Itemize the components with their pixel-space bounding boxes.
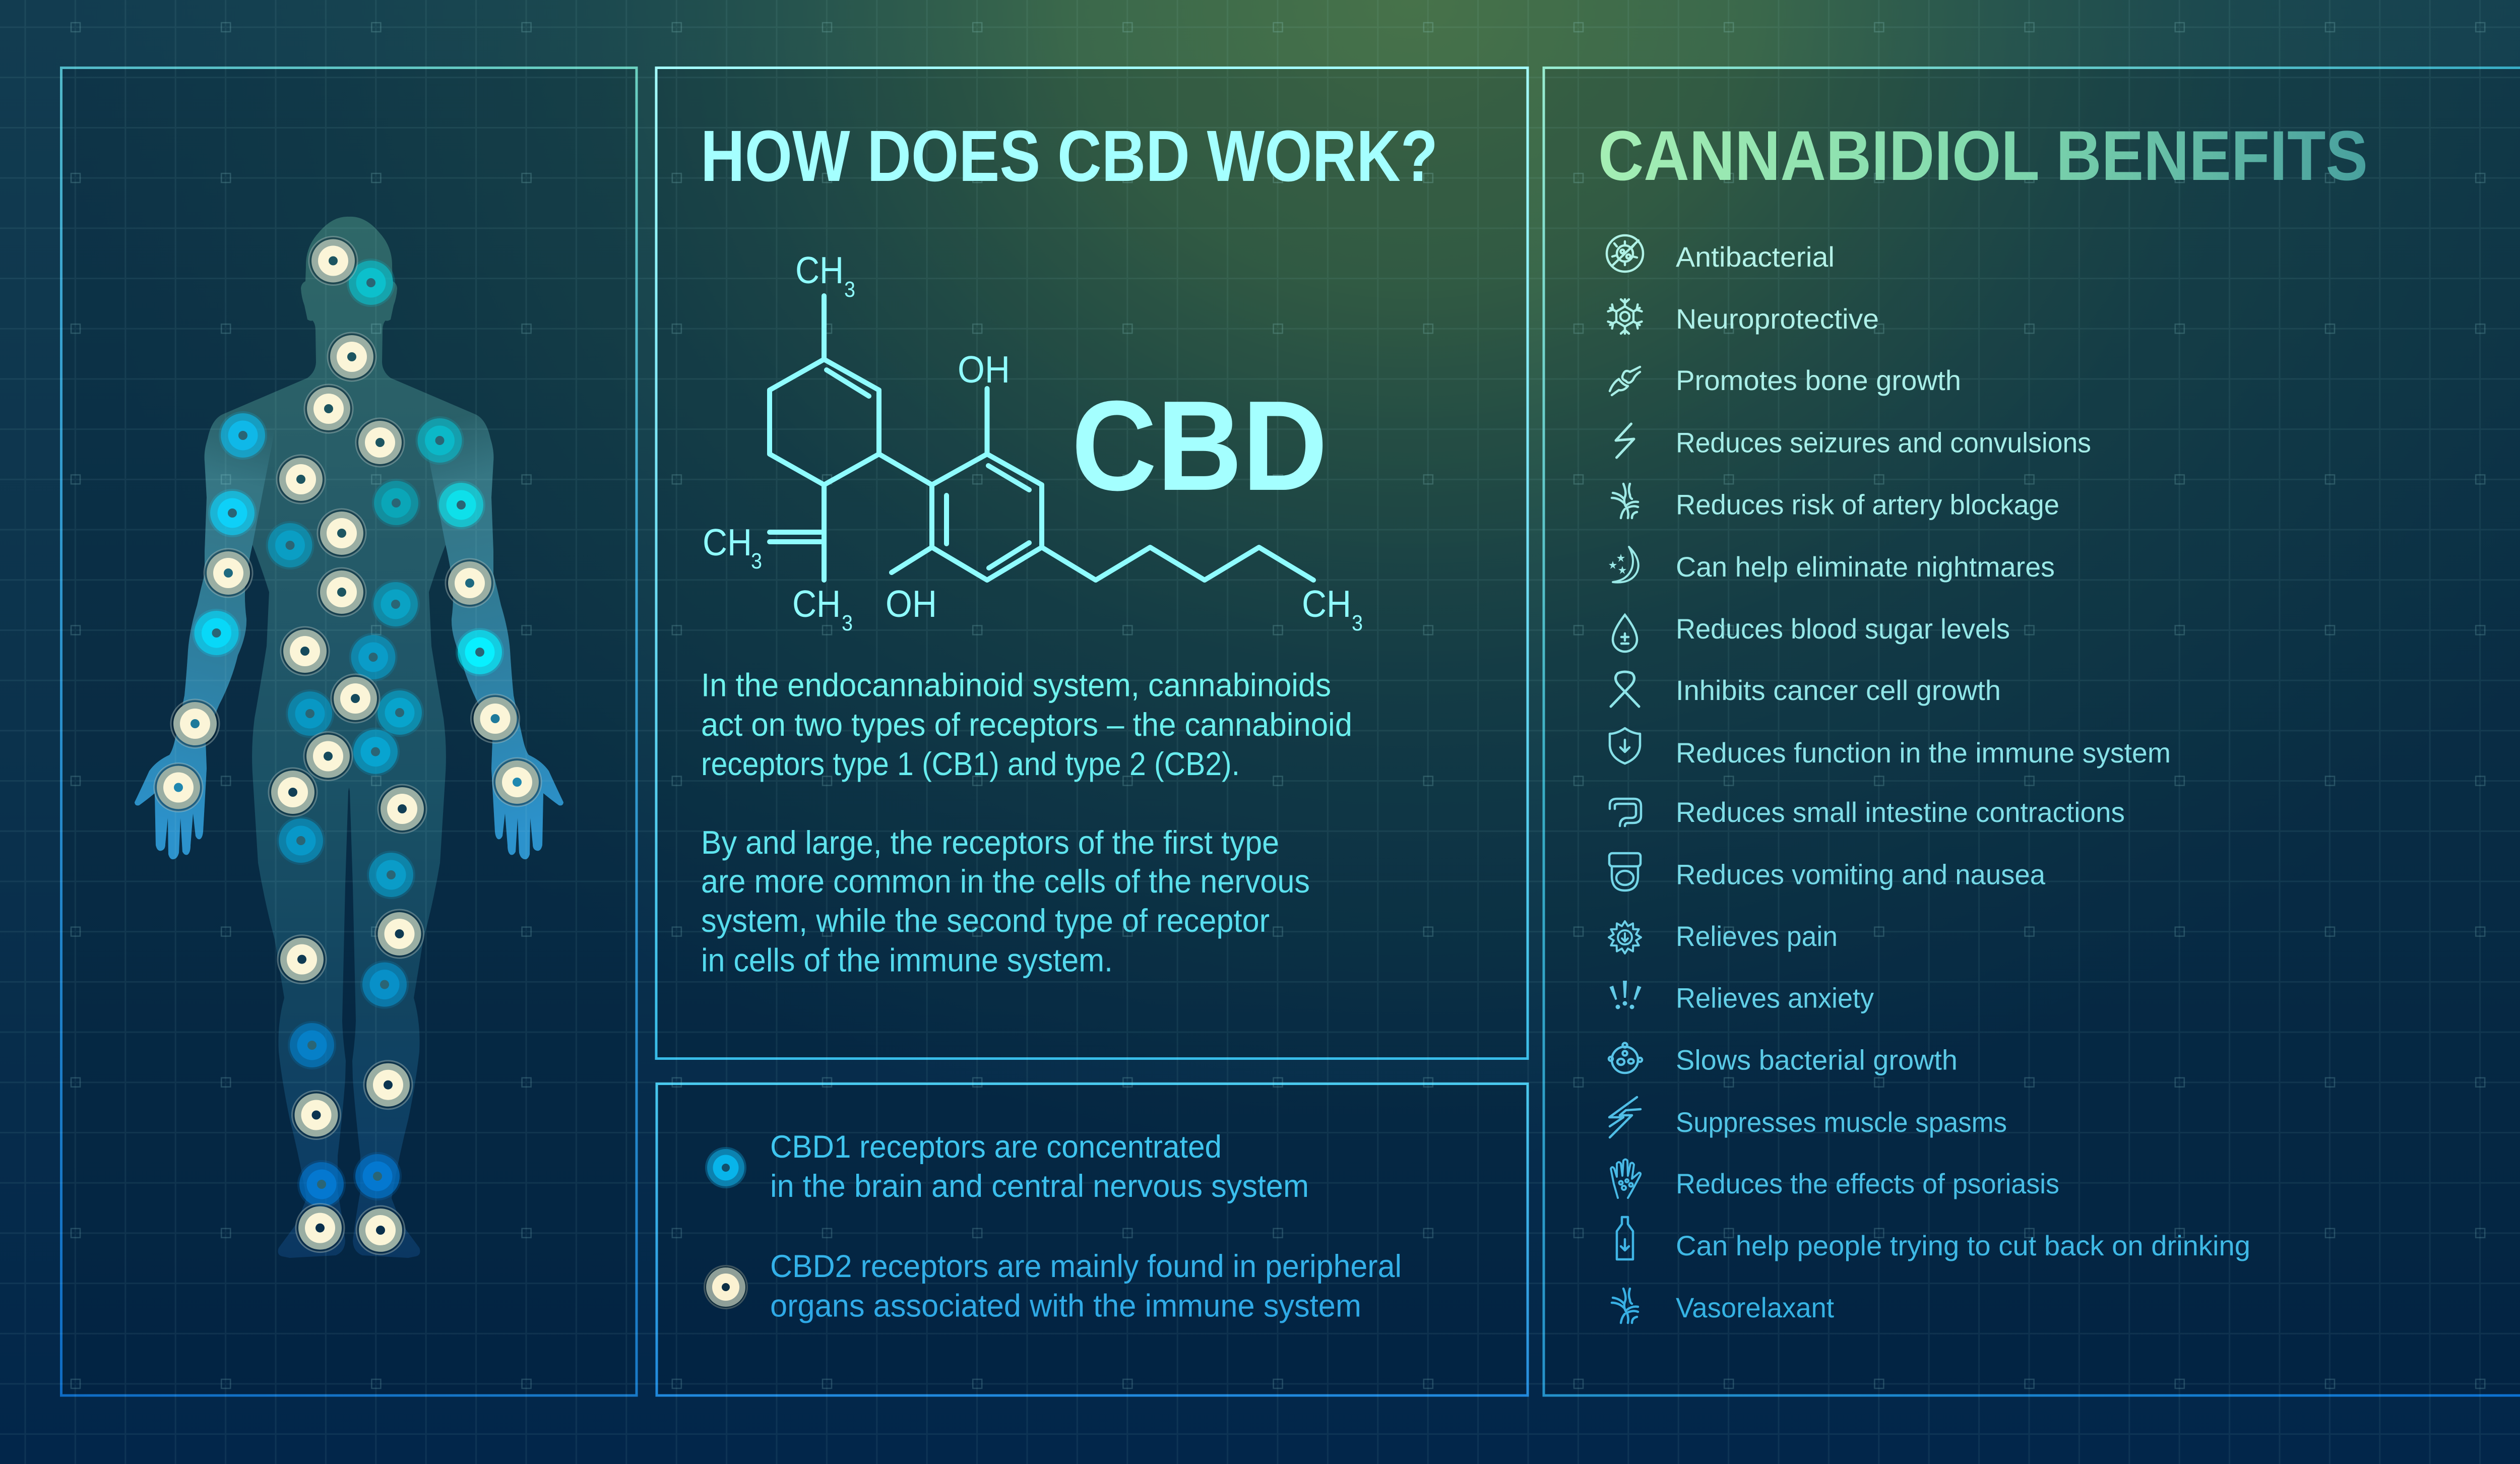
benefit: Reduces function in the immune system <box>1610 728 2171 769</box>
legend: CBD2 <box>704 1249 1402 1324</box>
label: Slows bacterial growth <box>1676 1044 1958 1076</box>
legend text CBD2 <box>770 1249 1402 1324</box>
benefit: Neuroprotective <box>1608 299 1879 335</box>
icon: blood drop <box>1613 615 1637 652</box>
panel: cannabidiol benefits <box>1544 68 2520 1395</box>
icon: intestine <box>1610 799 1641 826</box>
CBD molecule diagram: 3 <box>1352 611 1363 635</box>
label: Reduces blood sugar levels <box>1676 613 2010 645</box>
benefit: Reduces the effects of psoriasis <box>1611 1159 2059 1199</box>
icon: bottle <box>1617 1217 1633 1259</box>
legend text CBD1 <box>770 1129 1309 1204</box>
benefit: Slows bacterial growth <box>1609 1043 1958 1076</box>
label: Suppresses muscle spasms <box>1676 1106 2007 1138</box>
label: Can help eliminate nightmares <box>1676 551 2055 583</box>
CBD molecule diagram: CH <box>795 249 844 291</box>
heading: how does CBD work: HOW DOES CBD WORK? <box>701 115 1438 197</box>
benefit: Reduces blood sugar levels <box>1613 613 2010 652</box>
heading: cannabidiol benefits: CANNABIDIOL BENEFITS <box>1598 116 2368 195</box>
icon: bacterium <box>1609 1043 1642 1073</box>
icon: hand with spots <box>1611 1159 1641 1198</box>
body text <box>701 666 1352 979</box>
benefit: Reduces small intestine contractions <box>1610 796 2125 828</box>
panel: body map <box>61 68 637 1395</box>
body text: system, while the second type of receptor <box>701 902 1270 939</box>
CBD molecule diagram: 3 <box>751 549 762 574</box>
label: Relieves pain <box>1676 920 1838 952</box>
label: Reduces risk of artery blockage <box>1676 489 2059 521</box>
benefit: Reduces seizures and convulsions <box>1616 424 2091 459</box>
icon: no bacteria <box>1607 235 1643 272</box>
CBD molecule diagram: CH <box>1302 583 1351 625</box>
CBD molecule diagram: OH <box>886 583 937 625</box>
big CBD label: CBD <box>1072 374 1328 517</box>
icon: lightning <box>1616 424 1634 458</box>
icon: double lightning <box>1609 1097 1641 1137</box>
body text: By and large, the receptors of the first type <box>701 824 1279 861</box>
benefit: Promotes bone growth <box>1610 364 1961 396</box>
icon: blue receptor dot <box>705 1147 746 1188</box>
benefits list <box>1607 235 2250 1323</box>
panel: how does CBD work <box>656 68 1528 1058</box>
label: Promotes bone growth <box>1676 364 1961 396</box>
benefit: Can help eliminate nightmares <box>1609 547 2055 583</box>
legend: CBD1 <box>705 1129 1309 1204</box>
CBD molecule diagram <box>703 249 1363 635</box>
label: Reduces seizures and convulsions <box>1676 426 2091 459</box>
CBD molecule diagram: OH <box>958 348 1010 391</box>
icon: neuron <box>1608 299 1642 334</box>
benefit: Suppresses muscle spasms <box>1609 1097 2007 1138</box>
CBD molecule diagram: 3 <box>844 277 855 302</box>
body text: are more common in the cells of the nervous <box>701 863 1310 900</box>
icon: moon and stars <box>1609 547 1639 583</box>
benefit: Reduces risk of artery blockage <box>1612 484 2059 521</box>
body text: in cells of the immune system. <box>701 941 1113 979</box>
icon: cream receptor dot <box>704 1265 748 1309</box>
label: Antibacterial <box>1676 241 1835 273</box>
CBD molecule diagram: 3 <box>842 611 853 635</box>
icon: artery <box>1612 484 1638 518</box>
benefit: Antibacterial <box>1607 235 1835 273</box>
icon: pain burst <box>1609 921 1641 953</box>
label: Reduces small intestine contractions <box>1676 796 2125 828</box>
legend text CBD2: CBD2 receptors are mainly found in peripheral <box>770 1249 1402 1284</box>
label: Reduces function in the immune system <box>1676 737 2171 769</box>
benefit: Relieves anxiety <box>1609 981 1874 1014</box>
human body silhouette <box>135 217 563 1258</box>
label: Can help people trying to cut back on drinking <box>1676 1230 2250 1261</box>
icon: exclamation marks <box>1609 981 1642 1009</box>
body text: In the endocannabinoid system, cannabinoids <box>701 666 1331 704</box>
label: Inhibits cancer cell growth <box>1676 674 2001 706</box>
label: Vasorelaxant <box>1676 1292 1834 1323</box>
CBD molecule diagram: CH <box>703 521 752 563</box>
legend text CBD1: CBD1 receptors are concentrated <box>770 1129 1222 1165</box>
icon: bone joint <box>1610 367 1640 395</box>
label: Reduces the effects of psoriasis <box>1676 1168 2059 1199</box>
icon: ribbon <box>1611 672 1639 707</box>
benefit: Vasorelaxant <box>1612 1289 1834 1323</box>
benefit: Inhibits cancer cell growth <box>1611 672 2001 707</box>
panel: receptor legend <box>657 1084 1528 1395</box>
label: Neuroprotective <box>1676 303 1879 335</box>
body text: act on two types of receptors – the cannabinoid <box>701 706 1352 743</box>
benefit: Reduces vomiting and nausea <box>1609 853 2046 890</box>
legend text CBD1: in the brain and central nervous system <box>770 1169 1309 1204</box>
label: Reduces vomiting and nausea <box>1676 859 2046 890</box>
benefit: Relieves pain <box>1609 920 1838 953</box>
label: Relieves anxiety <box>1676 982 1874 1014</box>
legend text CBD2: organs associated with the immune system <box>770 1289 1361 1324</box>
receptor dots: CB2 cream <box>154 237 541 1254</box>
benefit: Can help people trying to cut back on drinking <box>1617 1217 2250 1261</box>
icon: shield <box>1610 728 1640 763</box>
icon: vessels <box>1612 1289 1638 1323</box>
receptor dots: CB1 blue <box>193 259 504 1208</box>
CBD molecule diagram: CH <box>792 583 841 625</box>
body text: receptors type 1 (CB1) and type 2 (CB2). <box>701 745 1240 782</box>
icon: toilet <box>1609 853 1641 890</box>
